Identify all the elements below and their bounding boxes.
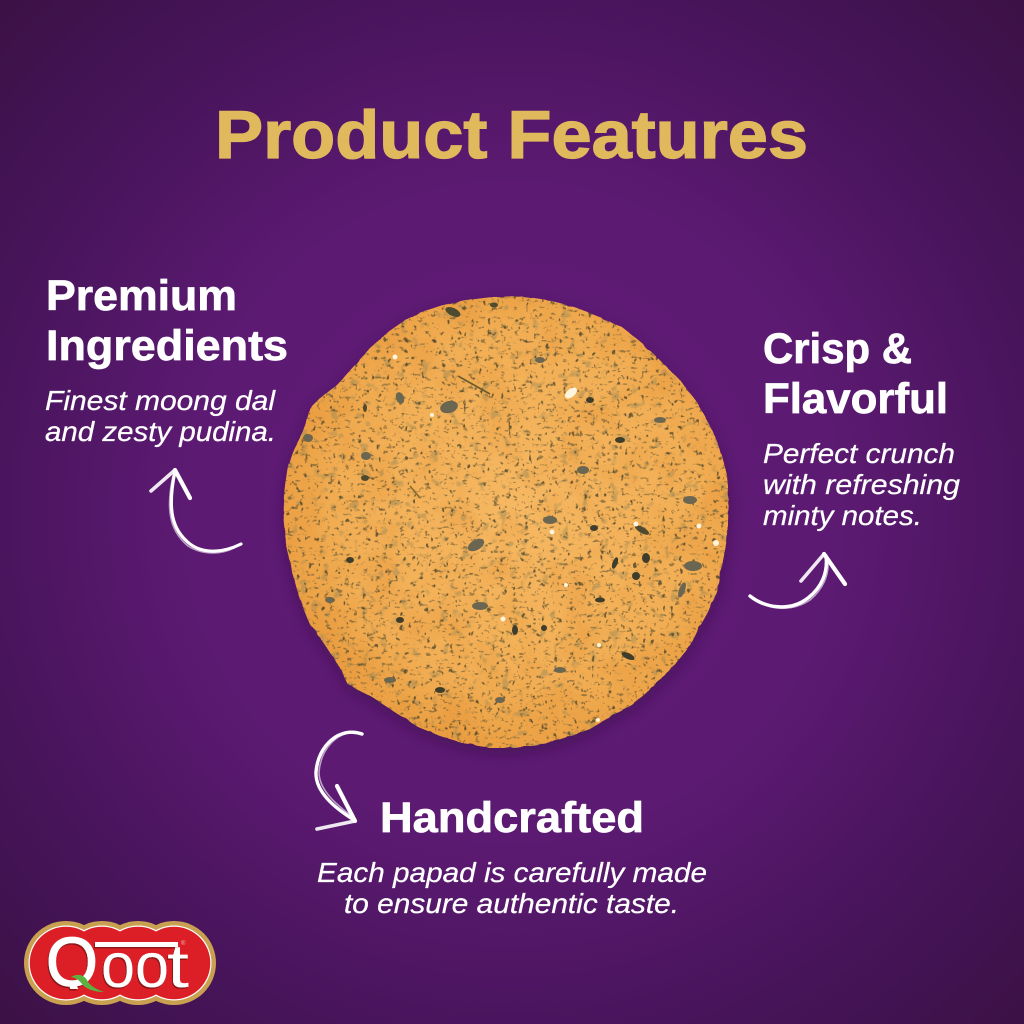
description: handcrafted: to ensure authentic taste.: [344, 888, 679, 919]
heading: crisp and flavorful: Flavorful: [763, 375, 948, 423]
description: handcrafted: [317, 857, 707, 919]
title: Product Features: [215, 97, 808, 173]
panel: premium ingredients: [45, 272, 288, 447]
papad base: [275, 290, 735, 755]
logo registered mark: ®: [181, 940, 186, 947]
description: crisp and flavorful: Perfect crunch: [763, 438, 955, 469]
papad light flecks: [392, 354, 719, 722]
papad shadow: [283, 302, 729, 754]
description: premium ingredients: and zesty pudina.: [45, 416, 276, 447]
heading: crisp and flavorful: Crisp &: [763, 325, 912, 373]
heading: crisp and flavorful: [763, 325, 948, 423]
logo wordmark: [48, 936, 188, 990]
heading: premium ingredients: Premium: [46, 272, 237, 320]
product image: papad: [275, 290, 735, 755]
logo badge: [24, 921, 216, 1005]
description: crisp and flavorful: minty notes.: [763, 500, 922, 531]
heading: premium ingredients: Ingredients: [46, 322, 288, 370]
panel: crisp and flavorful: [763, 325, 961, 531]
logo wordmark: oo: [101, 931, 169, 1001]
arrow: crisp and flavorful: [750, 554, 845, 608]
description: premium ingredients: [45, 385, 276, 447]
panel: handcrafted: [317, 794, 707, 919]
description: crisp and flavorful: [763, 438, 961, 531]
logo wordmark: t: [167, 932, 189, 1000]
description: crisp and flavorful: with refreshing: [763, 469, 961, 500]
logo: Qoot: [24, 921, 216, 1005]
arrow: handcrafted: [316, 732, 362, 829]
papad herb flecks: [303, 302, 702, 703]
description: premium ingredients: Finest moong dal: [45, 385, 276, 416]
logo wordmark: Q: [46, 923, 98, 1001]
heading: handcrafted: Handcrafted: [380, 794, 644, 842]
arrow: premium ingredients: [151, 470, 241, 553]
logo leaf: [71, 975, 104, 992]
description: handcrafted: Each papad is carefully made: [317, 857, 707, 888]
heading: premium ingredients: [46, 272, 288, 370]
